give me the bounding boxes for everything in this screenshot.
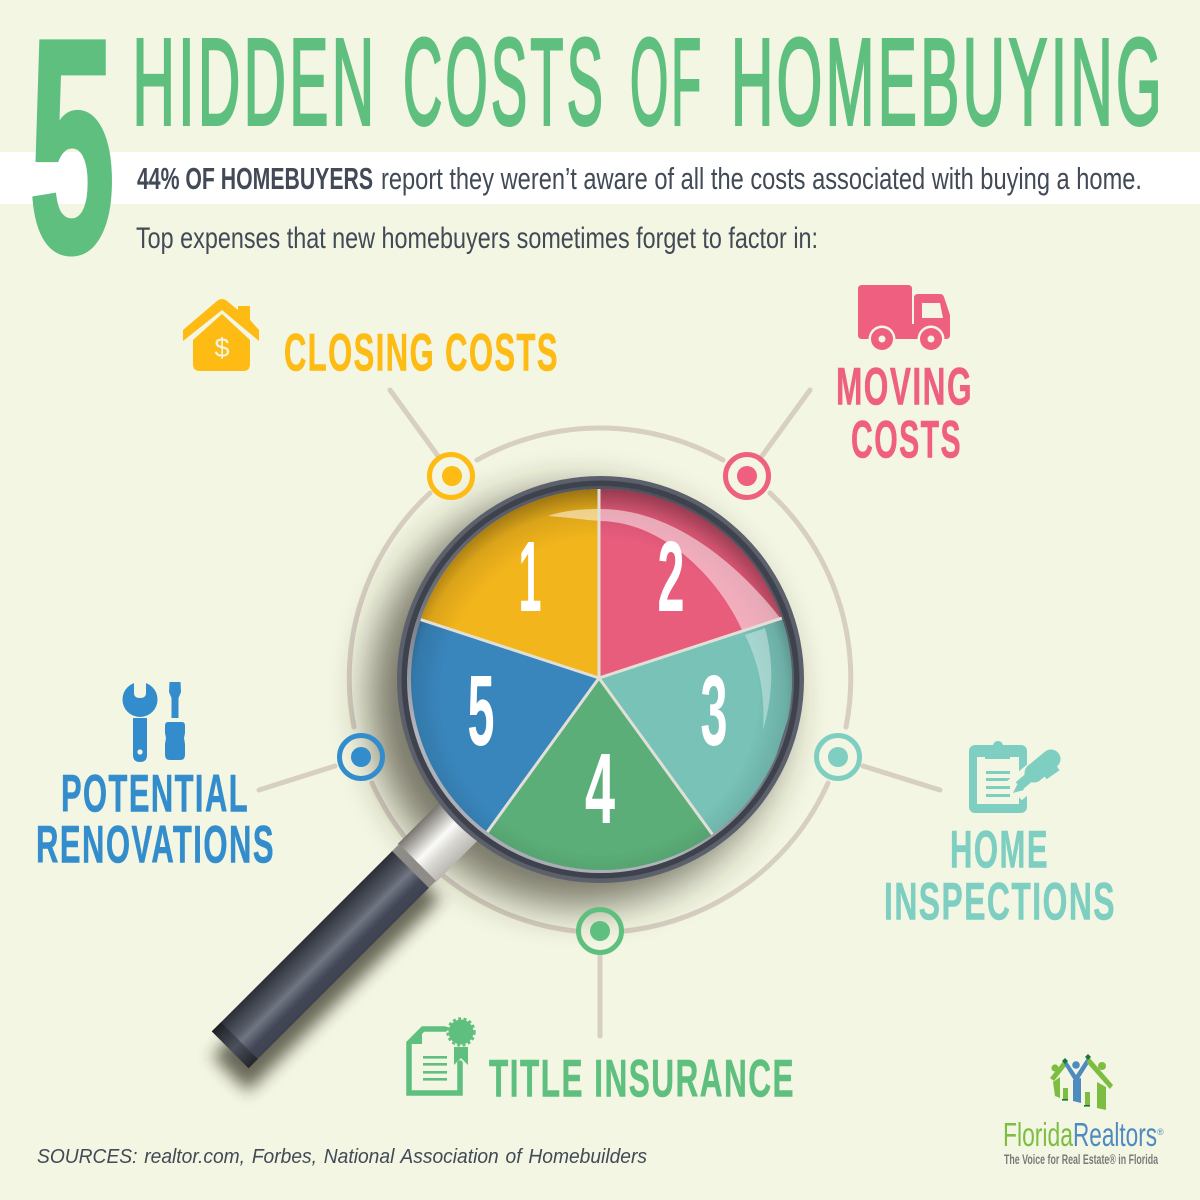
lens vignette <box>411 489 792 870</box>
marker: potential renovations <box>340 736 382 778</box>
pie segment 3 <box>602 618 792 834</box>
label: moving costs: MOVING <box>836 358 973 416</box>
title: HIDDEN <box>132 14 378 152</box>
marker: title insurance <box>578 910 622 952</box>
magnifying glass: 3 <box>700 655 728 767</box>
segment numbers: 2 <box>658 521 684 633</box>
icon: house with dollar sign: $ <box>214 333 230 363</box>
label: moving costs <box>836 358 973 470</box>
pie segment 2 <box>599 489 782 676</box>
segment numbers: 1 <box>518 521 542 633</box>
ring connecting the five markers <box>349 428 851 931</box>
pie separators <box>420 489 782 836</box>
segment numbers <box>468 521 728 845</box>
pie segment 1 <box>420 489 599 676</box>
label: closing costs: CLOSING COSTS <box>284 324 559 382</box>
title <box>132 14 1165 152</box>
logo wordmark: Realtors <box>1073 1116 1157 1153</box>
icon: house with dollar sign <box>183 299 259 371</box>
title: OF <box>630 14 704 152</box>
lens rim <box>397 476 804 883</box>
magnifier shadow <box>213 490 786 1092</box>
lens glare <box>548 509 781 730</box>
pie segment 5 <box>411 620 596 832</box>
label: potential renovations <box>36 764 275 874</box>
segment numbers: 5 <box>468 655 494 767</box>
handle <box>211 799 481 1069</box>
logo: Florida Realtors <box>1003 1054 1164 1167</box>
title: COSTS <box>403 14 606 152</box>
icon: certificate with seal <box>408 1018 474 1093</box>
logo wordmark: Florida <box>1003 1116 1073 1153</box>
label: potential renovations: POTENTIAL <box>61 764 249 824</box>
icon: wrench and screwdriver <box>122 678 185 762</box>
logo wordmark: ® <box>1157 1127 1164 1137</box>
marker: home inspections <box>816 736 860 778</box>
label: moving costs: COSTS <box>851 410 962 470</box>
marker: moving costs <box>726 454 768 498</box>
pie segment 4 <box>488 680 712 870</box>
logo wordmark <box>1003 1116 1164 1153</box>
marker: closing costs <box>430 454 472 498</box>
icon: moving truck <box>858 285 950 352</box>
intro statement: 44% OF HOMEBUYERS <box>137 161 373 196</box>
label: home inspections <box>884 820 1116 932</box>
white intro band <box>0 152 1200 204</box>
magnifying glass <box>211 440 825 1069</box>
segment numbers: 4 <box>585 733 615 845</box>
label: potential renovations: RENOVATIONS <box>36 816 275 874</box>
label: title insurance: TITLE INSURANCE <box>489 1050 795 1108</box>
pie wedges <box>411 489 792 870</box>
logo figures <box>1050 1054 1113 1110</box>
subheading: Top expenses that new homebuyers sometimes forget to factor in: <box>136 222 818 255</box>
sources: SOURCES: realtor.com, Forbes, National Association of Homebuilders <box>37 1146 647 1168</box>
connector spokes <box>259 390 940 1036</box>
icon: clipboard and pen <box>969 741 1058 813</box>
label: home inspections: HOME <box>950 820 1049 880</box>
